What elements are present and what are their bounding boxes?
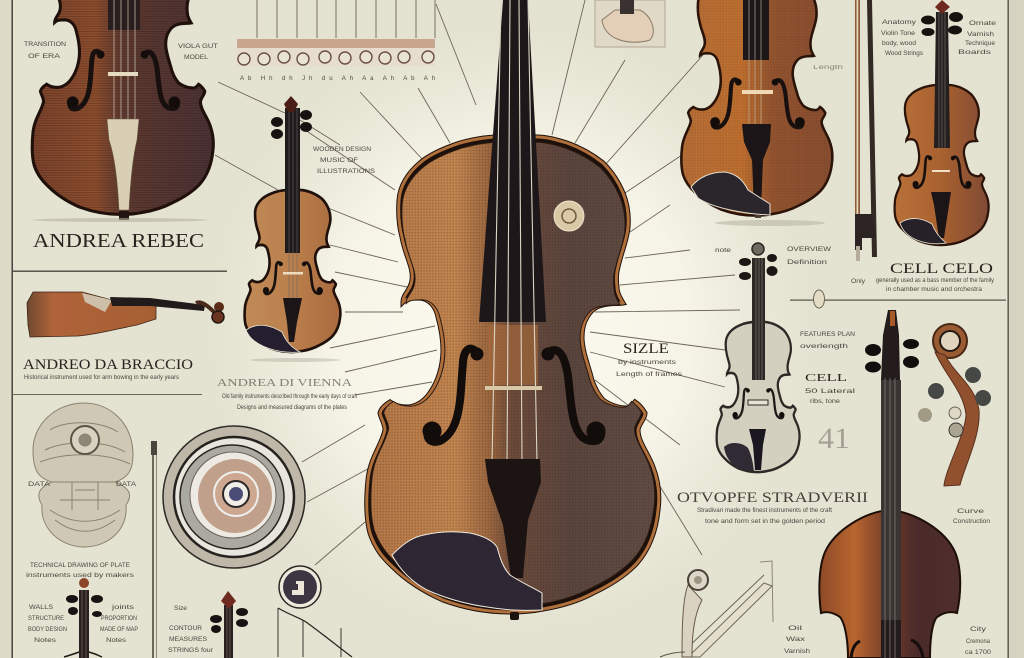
f-holes: [423, 348, 605, 442]
caption: bottom-left violin: [28, 605, 138, 644]
caption: bottom-centre-left violin: [168, 606, 213, 654]
bottom-centre-left violin neck: [210, 591, 248, 658]
caption: small labels top-left: OF ERA: [28, 54, 60, 60]
caption: bottom-left violin: Notes: [34, 638, 56, 644]
bow: [855, 0, 877, 261]
caption: small centre-left labels: ILLUSTRATIONS: [317, 169, 375, 175]
caption: Stradivari: tone and form set in the golden period: [705, 519, 825, 525]
caption: bottom-centre-left violin: Size: [174, 606, 188, 612]
end button: [510, 612, 519, 620]
faded heading and caption: [217, 377, 357, 411]
caption: top-right small violin: [881, 20, 997, 57]
caption: mid-right labels: note: [715, 248, 732, 254]
caption: top-right small violin: Violin Tone: [881, 31, 916, 37]
violin: small centre-left: [245, 96, 340, 362]
centre glow: [488, 325, 538, 385]
caption: sketch labels: TECHNICAL DRAWING OF PLATE: [30, 563, 130, 569]
caption: bottom-left violin: joints: [110, 605, 134, 611]
caption: top-right small violin: Anatomy: [882, 20, 916, 26]
string nut diagram: [236, 0, 435, 82]
caption: right of viola: FEATURES PLAN: [800, 332, 855, 338]
caption: right of viola: 50 Lateral: [805, 389, 855, 395]
small fragment: top instrument panel: [595, 0, 665, 47]
caption: bottom-centre-left violin: STRINGS four: [168, 648, 213, 654]
sketch: soundboard diagram: [33, 403, 133, 547]
small oval marker: [814, 290, 824, 308]
caption: right of viola: overlength: [800, 344, 848, 350]
caption: mid-right labels: Definition: [787, 260, 827, 266]
caption: Cell Celo: Only: [851, 279, 865, 285]
caption: small labels top-left: VIOLA GUT: [178, 44, 218, 50]
heading: Stradivari: OTVOPFE STRADVERII: [677, 490, 868, 506]
caption: Andreo da Braccio: Historical instrument used for arm bowing in the early years: [24, 375, 179, 381]
tailpiece: [485, 459, 541, 578]
heading: Andrea Rebec: ANDREA REBEC: [33, 230, 204, 252]
violin: top-right: [681, 0, 832, 226]
caption: top-right small violin: body, wood: [882, 41, 916, 47]
string nut diagram: Ab Hh dh Jh du Ah Aa Ah Ab Ah: [240, 76, 435, 82]
caption: small labels top-left: TRANSITION: [24, 42, 66, 48]
caption: bottom-centre-left violin: MEASURES: [169, 637, 207, 643]
caption: small labels top-left: MODEL: [184, 55, 209, 61]
instrument: rebec lying horizontal: [27, 292, 224, 337]
caption: right of viola: [800, 332, 855, 455]
caption: bottom-left violin: Notes: [106, 638, 126, 644]
heading: Andreo da Braccio: ANDREO DA BRACCIO: [23, 357, 193, 373]
chinrest: [392, 532, 542, 610]
caption: sketch labels: DATA: [28, 482, 50, 488]
caption: bottom-centre-left violin: CONTOUR: [169, 626, 203, 632]
caption: bottom-left violin: MADE OF MAP: [100, 627, 138, 633]
caption: bottom centre-right: Cremona: [966, 639, 991, 645]
faded heading and caption: Old family instruments described through the early days of craft: [222, 394, 357, 400]
caption: bottom centre-right: Varnish: [784, 649, 810, 655]
caption: Cell Celo: in chamber music and orchestra: [886, 287, 983, 293]
caption: scroll: [953, 509, 990, 525]
caption: bottom centre-right: Wax: [786, 637, 805, 643]
caption: scroll: Construction: [953, 519, 990, 525]
caption: Cell Celo: [851, 278, 994, 293]
caption: bottom centre-right: Oil: [788, 626, 802, 632]
caption: bottom-left violin: WALLS: [29, 605, 53, 611]
caption: sketch labels: DATA: [116, 482, 136, 488]
caption: scroll: Curve: [957, 509, 985, 515]
caption: top-right small violin: Varnish: [967, 32, 994, 38]
caption: bottom-left violin: BODY DESIGN: [28, 627, 67, 633]
caption: Cell Celo: generally used as a bass member of the family: [876, 278, 994, 284]
caption: Size: Length of frames: [616, 372, 682, 378]
caption: bottom centre-right: [784, 626, 992, 656]
caption: Size: by instruments: [618, 360, 676, 366]
caption: top-right small violin: Ornate: [969, 21, 997, 27]
caption: sketch labels: [26, 482, 136, 579]
caption: small labels top-left: [24, 42, 218, 61]
main violin body: [367, 137, 659, 612]
caption: bottom-left violin: STRUCTURE: [28, 616, 64, 622]
caption: right of viola: 41: [818, 422, 850, 455]
main violin: [367, 0, 659, 620]
rosette disc: [163, 426, 305, 568]
medallion: [554, 201, 584, 231]
caption: top-right small violin: Technique: [965, 41, 996, 47]
violin: top-left Andrea Rebec: [32, 0, 213, 222]
caption: mid-right labels: OVERVIEW: [787, 247, 831, 253]
faded heading and caption: Designs and measured diagrams of the plates: [237, 405, 347, 411]
bridge: [485, 386, 542, 390]
caption: right of viola: CELL: [805, 373, 847, 384]
caption: right of viola: ribs, tone: [810, 399, 841, 405]
caption: sketch labels: instruments used by makers: [26, 573, 134, 579]
bottom bow and scroll sketch: [660, 561, 773, 657]
caption: top-right small violin: Wood Strings: [885, 51, 923, 57]
violin: white viola: [717, 243, 800, 472]
bottom graph sketch: [278, 608, 352, 657]
caption: Size: SIZLE: [623, 341, 669, 357]
caption: small centre-left labels: WOODEN DESIGN: [313, 147, 371, 153]
strings: [492, 0, 537, 463]
caption: Stradivari: [697, 508, 832, 525]
fingerboard: [479, 0, 546, 322]
vertical rod: [151, 441, 157, 658]
faded heading and caption: ANDREA DI VIENNA: [217, 377, 352, 389]
caption: Stradivari: Stradivari made the finest instruments of the craft: [697, 508, 832, 514]
caption: mid-right labels: Length: [813, 65, 843, 71]
cello bottom-right: [819, 310, 960, 658]
heading: Cell Celo: CELL CELO: [890, 261, 993, 277]
bottom-left violin neck: [64, 578, 103, 658]
caption: bottom-left violin: PROPORTION: [101, 616, 137, 622]
radiating callout lines: [215, 0, 740, 565]
caption: small centre-left labels: MUSIC OF: [320, 158, 358, 164]
caption: top-right small violin: Boards: [958, 50, 991, 56]
badge: [279, 566, 321, 608]
caption: bottom centre-right: ca 1700: [965, 650, 992, 656]
cello scroll detail: [918, 324, 991, 486]
violin: top-right small: [895, 0, 989, 245]
caption: Size: [616, 341, 682, 378]
caption: small centre-left labels: [313, 147, 375, 175]
caption: bottom centre-right: City: [970, 627, 986, 633]
caption: mid-right labels: [715, 65, 843, 266]
